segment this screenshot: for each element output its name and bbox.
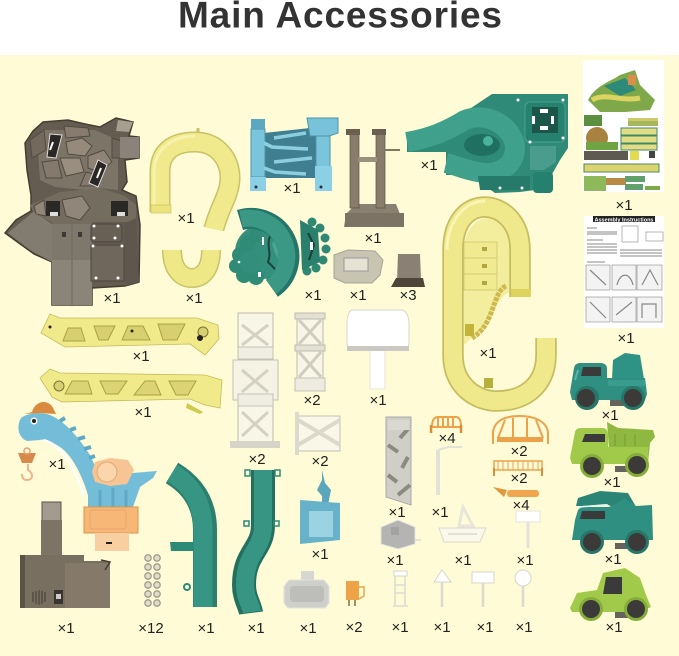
part: white rectangle sign	[516, 511, 540, 548]
poster: assembly instructions: Assembly Instructions	[594, 218, 654, 224]
part: white T sign	[347, 310, 409, 389]
count: ×2	[248, 451, 266, 468]
count: ×1	[617, 330, 635, 347]
count: ×1	[515, 619, 533, 636]
count: ×1	[391, 619, 409, 636]
part: green S pipe	[244, 470, 280, 613]
part: orange clip	[346, 581, 364, 606]
part: teal excavator truck	[572, 491, 653, 554]
part: grey hexagon piece	[381, 520, 421, 549]
count: ×1	[516, 552, 534, 569]
part: small rock piece	[334, 250, 383, 283]
count: ×2	[345, 619, 363, 636]
count: ×3	[399, 287, 417, 304]
part: blue dinosaur crane	[18, 402, 157, 551]
count: ×1	[604, 551, 622, 568]
count: ×1	[433, 619, 451, 636]
part: yellow hook track	[151, 128, 230, 229]
count: ×2	[303, 392, 321, 409]
count: ×1	[605, 619, 623, 636]
part: white triangle basket	[439, 507, 486, 542]
part: blue ramp tower	[250, 118, 338, 191]
part: short white tower	[295, 313, 325, 391]
count: ×1	[177, 210, 195, 227]
count: ×1	[304, 287, 322, 304]
count: ×1	[311, 546, 329, 563]
count: ×1	[364, 230, 382, 247]
count: ×1	[299, 620, 317, 637]
count: ×1	[349, 287, 367, 304]
part: large yellow loop track	[447, 201, 546, 401]
count: ×1	[431, 504, 449, 521]
part: green dump truck	[570, 422, 655, 478]
count: ×1	[388, 504, 406, 521]
count: ×1	[197, 620, 215, 637]
count: ×1	[247, 620, 265, 637]
count: ×2	[311, 453, 329, 470]
part: brown power box	[20, 502, 110, 608]
part: brown pillar frame	[344, 129, 404, 227]
count: ×1	[132, 348, 150, 365]
part: lower yellow arm	[40, 369, 222, 414]
part: upper yellow arm	[41, 314, 219, 355]
part: long orange fence	[494, 461, 542, 476]
part: rock base	[5, 118, 140, 305]
count: ×2	[510, 443, 528, 460]
part: beads	[145, 555, 160, 606]
part: horizontal white frame	[295, 412, 340, 455]
count: ×1	[601, 407, 619, 424]
poster: assembly instructions	[584, 216, 664, 328]
part: teal mixer truck	[570, 353, 647, 410]
poster: sticker sheet	[583, 60, 664, 192]
part: white ladder	[393, 571, 408, 606]
count: ×1	[479, 345, 497, 362]
part: square sign	[472, 572, 494, 607]
count: ×1	[57, 620, 75, 637]
part: grey zigzag ramp	[386, 417, 411, 505]
part: tall white tower	[230, 313, 280, 448]
count: ×1	[134, 404, 152, 421]
part: green curved pipe	[170, 473, 205, 607]
count: ×4	[438, 430, 456, 447]
count: ×1	[48, 456, 66, 473]
count: ×1	[603, 474, 621, 491]
count: ×1	[283, 180, 301, 197]
count: ×1	[420, 157, 438, 174]
count: ×1	[185, 290, 203, 307]
count: ×1	[615, 197, 633, 214]
part: orange bar	[493, 487, 539, 497]
part: green half-disc track	[229, 218, 330, 288]
count: ×1	[369, 392, 387, 409]
count: ×4	[512, 497, 530, 514]
count: ×12	[138, 620, 164, 637]
part: round sign	[515, 570, 531, 607]
part: orange gate	[431, 417, 461, 433]
count: ×1	[103, 290, 121, 307]
part: green bulldozer	[570, 568, 651, 621]
part: orange arch bridge	[493, 416, 548, 444]
part: brown wedge block	[391, 254, 425, 287]
part: grey cup	[284, 571, 329, 608]
part: white street lamp	[438, 447, 462, 495]
count: ×2	[510, 470, 528, 487]
part: small yellow U track	[172, 250, 211, 278]
count: ×1	[386, 552, 404, 569]
count: ×1	[476, 619, 494, 636]
part: orange hook	[18, 448, 36, 480]
part: big green swirl track	[407, 94, 568, 193]
count: ×1	[454, 552, 472, 569]
part: blue tank	[300, 470, 340, 544]
part: triangle sign	[434, 570, 451, 607]
